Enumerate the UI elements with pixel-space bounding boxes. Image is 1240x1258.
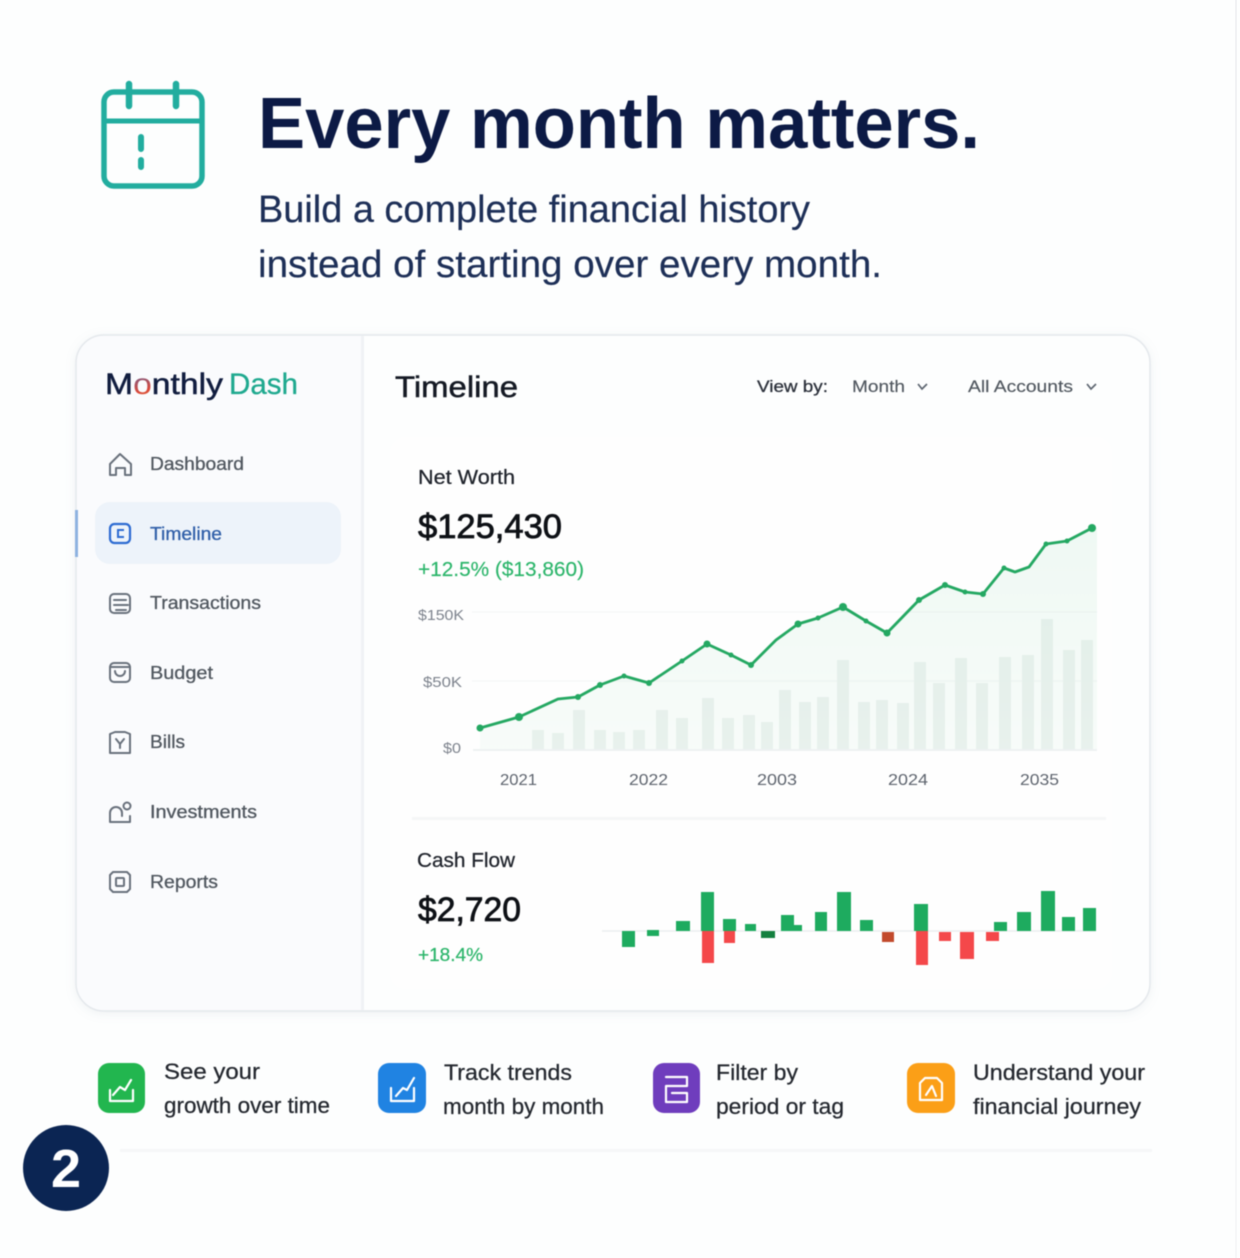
feature: filter by period: Filter by <box>716 1060 798 1085</box>
feature: filter by period: period or tag <box>716 1094 844 1119</box>
nav item: budget: Budget <box>150 663 213 683</box>
filter controls <box>757 377 1096 396</box>
nav item: reports: Reports <box>150 872 218 892</box>
nav item: investments <box>110 802 257 822</box>
cash flow label: Cash Flow <box>417 850 516 872</box>
filter controls: Month <box>852 377 905 396</box>
net worth label: Net Worth <box>418 467 515 489</box>
nav item: bills: Bills <box>150 732 185 752</box>
cash flow value: $2,720 <box>418 891 521 929</box>
nav item: investments: Investments <box>150 802 257 822</box>
net worth change: +12.5% ($13,860) <box>418 559 584 581</box>
nav item: transactions: Transactions <box>150 593 261 613</box>
icon: calendar <box>104 84 202 186</box>
step badge <box>23 1125 109 1211</box>
nav item: budget <box>110 663 213 683</box>
nav item: timeline active <box>75 502 341 564</box>
feature: track trends: month by month <box>443 1094 604 1119</box>
subtitle <box>258 189 882 286</box>
feature: filter by period <box>653 1060 844 1119</box>
line chart: net worth: 2024 <box>888 772 928 789</box>
bar chart: cash flow <box>602 891 1096 965</box>
line chart: net worth: $50K <box>423 674 462 691</box>
step badge: 2 <box>51 1139 81 1199</box>
panel: charts <box>390 437 1112 989</box>
line chart: net worth: 2022 <box>629 772 668 789</box>
panel: sidebar <box>75 336 364 1010</box>
title: Every month matters. <box>258 84 980 164</box>
feature: see your growth: See your <box>164 1059 260 1084</box>
panel: dashboard card <box>75 335 1150 1011</box>
nav item: dashboard: Dashboard <box>150 454 244 474</box>
nav item: bills <box>110 732 185 753</box>
subtitle: instead of starting over every month. <box>258 244 882 286</box>
cash flow change: +18.4% <box>418 945 483 965</box>
feature: see your growth <box>98 1059 330 1118</box>
line chart: net worth <box>418 524 1097 789</box>
line chart: net worth: $0 <box>443 740 461 757</box>
line chart: net worth: 2021 <box>500 772 537 789</box>
line chart: net worth: $150K <box>418 607 464 624</box>
feature: understand journey <box>907 1060 1145 1119</box>
feature: track trends <box>378 1060 604 1119</box>
net worth value: $125,430 <box>418 508 562 546</box>
filter controls: All Accounts <box>968 377 1073 396</box>
feature: see your growth: growth over time <box>164 1093 330 1118</box>
filter controls: View by: <box>757 377 828 396</box>
logo accent word: Dash <box>229 368 298 401</box>
nav item: reports <box>110 872 218 892</box>
line chart: net worth: 2035 <box>1020 772 1059 789</box>
subtitle: Build a complete financial history <box>258 189 810 231</box>
heading: timeline: Timeline <box>395 371 518 404</box>
nav item: timeline active: Timeline <box>150 524 222 544</box>
nav item: transactions <box>110 593 261 613</box>
feature: understand journey: Understand your <box>973 1060 1145 1085</box>
logo: Monthly <box>105 368 223 401</box>
line chart: net worth: 2003 <box>757 772 797 789</box>
feature: understand journey: financial journey <box>973 1094 1141 1119</box>
feature: track trends: Track trends <box>444 1060 572 1085</box>
nav item: dashboard <box>110 454 244 475</box>
